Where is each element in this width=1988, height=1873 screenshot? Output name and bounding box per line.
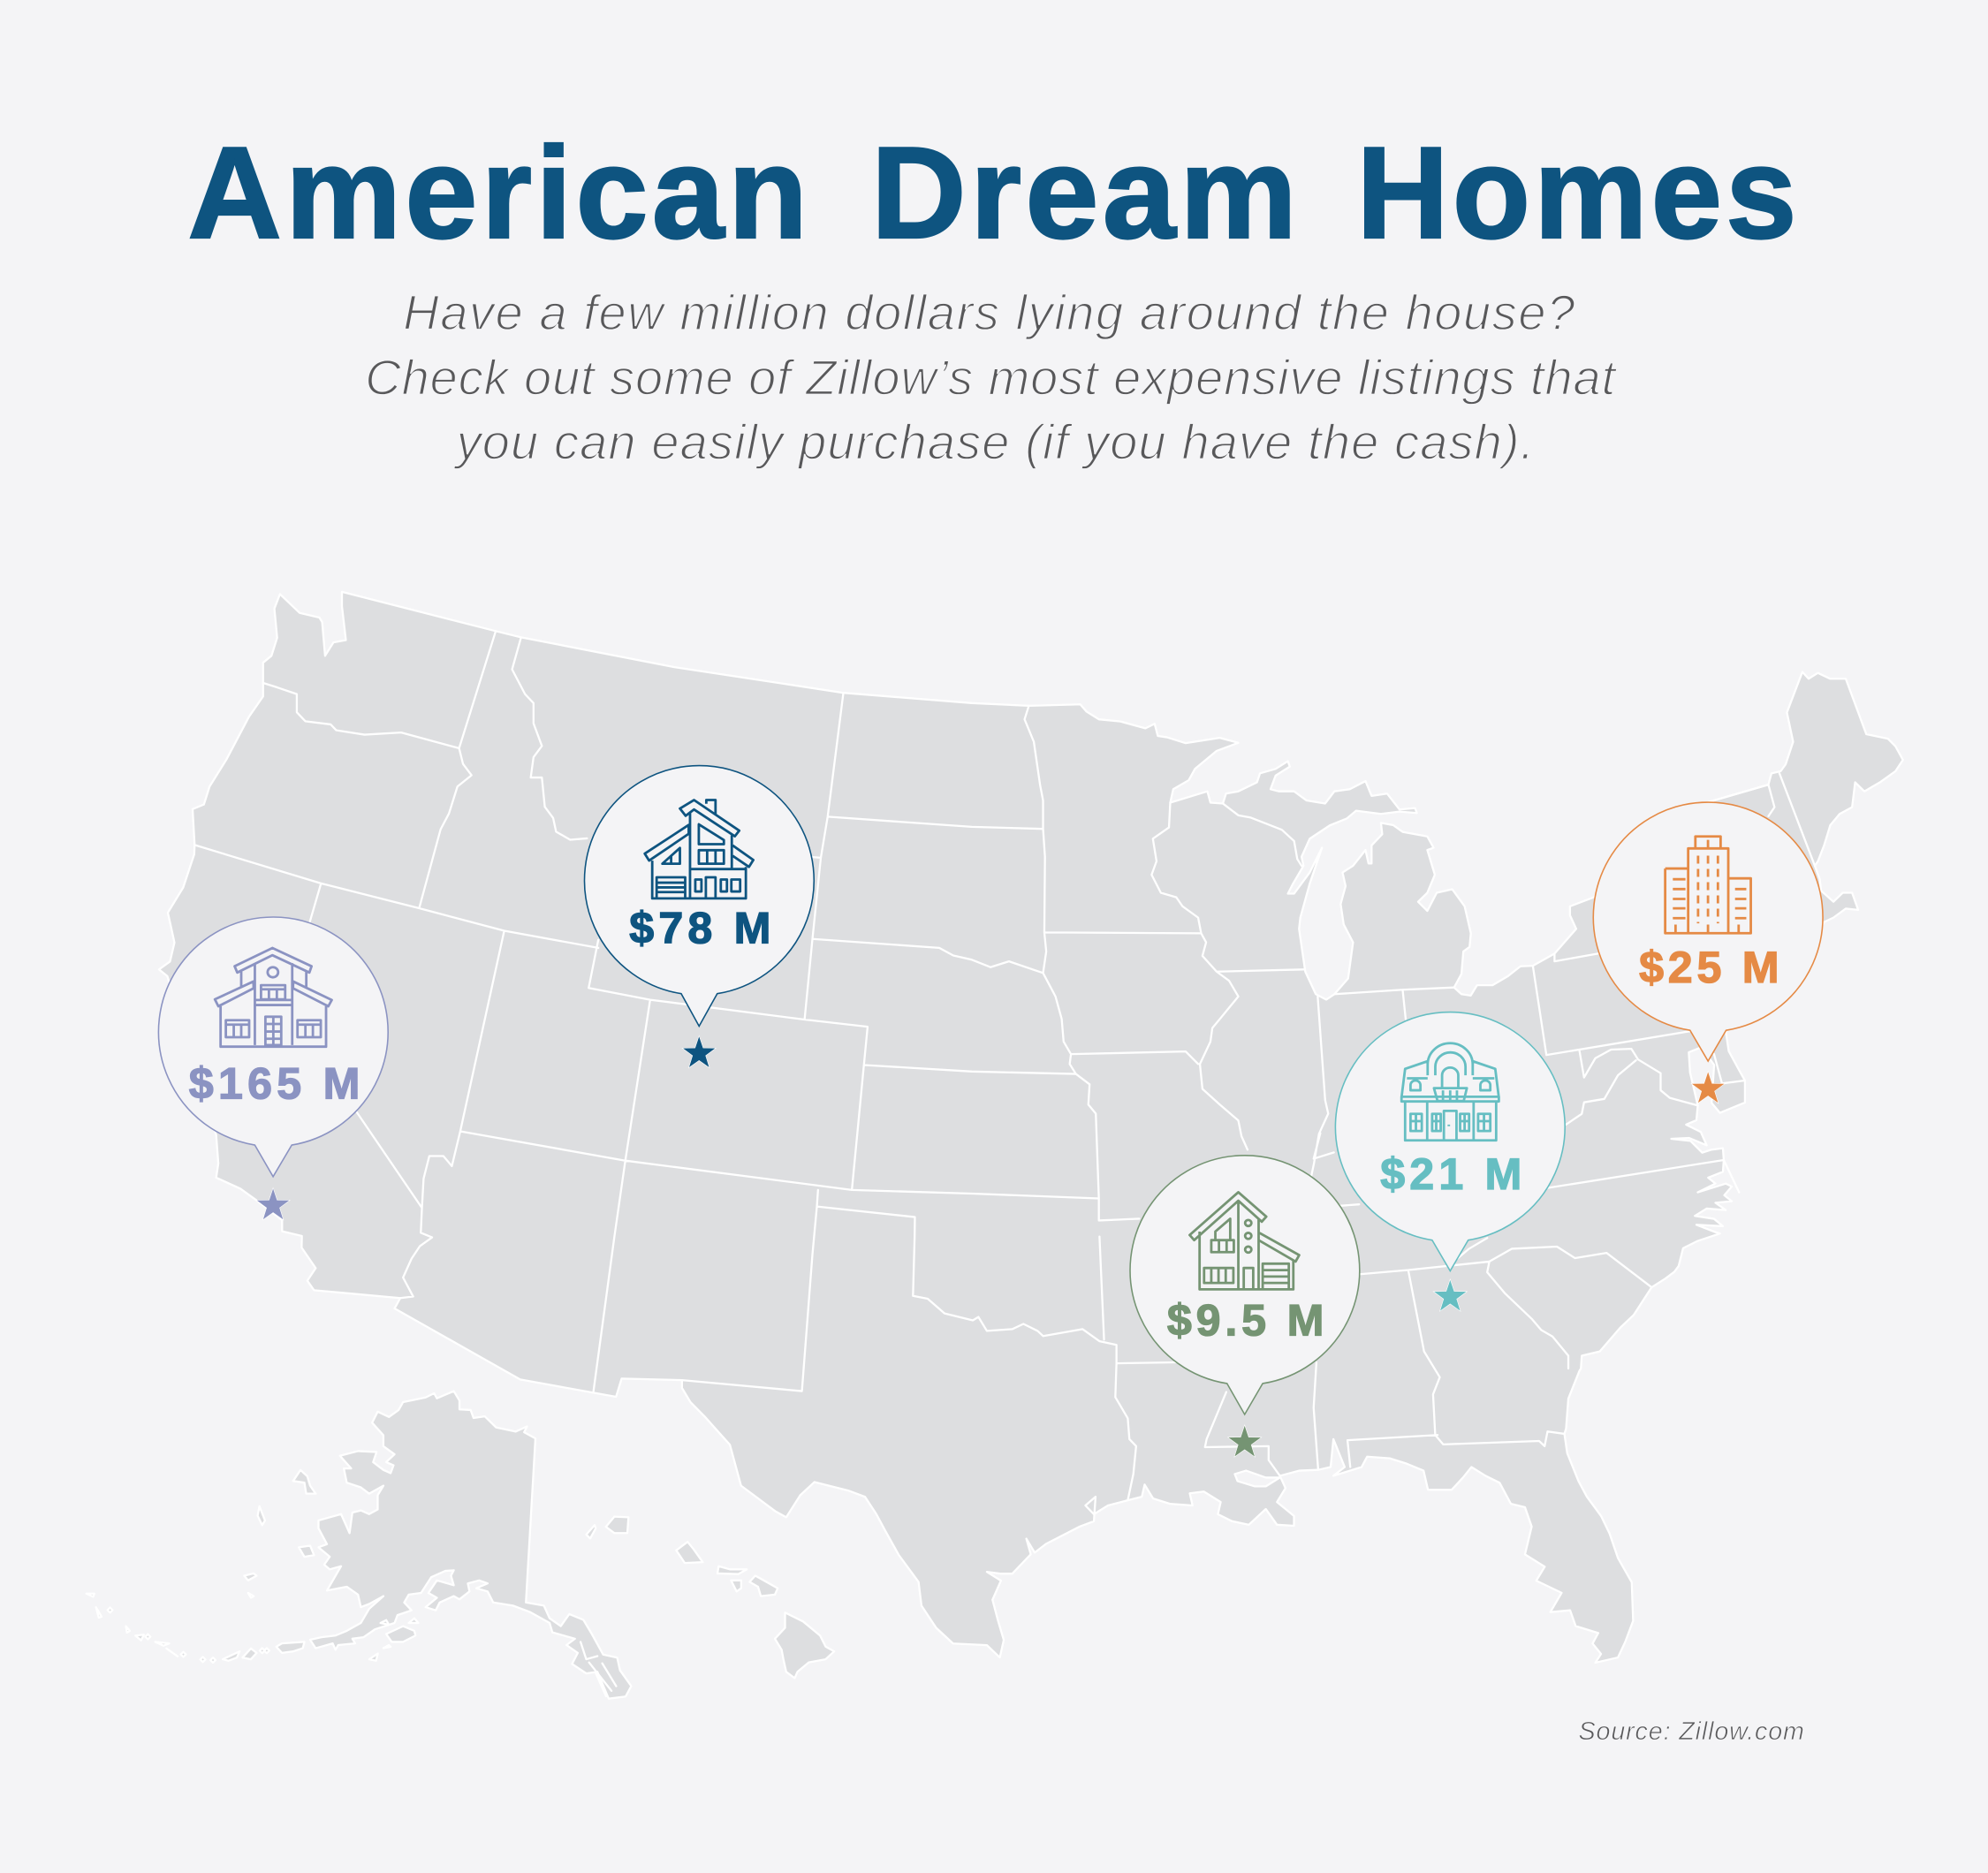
star <box>682 1035 716 1068</box>
subtitle: Check out some of Zillow’s most expensive listings that <box>365 349 1618 405</box>
marker: Washington DC area $25 M <box>1593 802 1823 1103</box>
Alaska <box>310 1391 631 1699</box>
star <box>256 1188 290 1220</box>
Hawaii <box>587 1517 834 1678</box>
title: Dream <box>871 120 1301 266</box>
icon: large farmhouse <box>215 948 332 1047</box>
price: $25 M <box>1639 943 1779 992</box>
Alaska islands <box>87 1470 418 1663</box>
bubble <box>1593 802 1823 1061</box>
marker: Georgia $21 M <box>1335 1012 1565 1311</box>
bubble <box>1130 1156 1360 1414</box>
bubble <box>158 917 388 1177</box>
icon: mansard mansion <box>1401 1043 1499 1141</box>
Lake Pontchartrain water <box>1234 1471 1280 1486</box>
star <box>1433 1279 1467 1311</box>
title: American <box>187 120 811 266</box>
map of the United States <box>87 592 1903 1699</box>
star <box>1228 1425 1262 1457</box>
title <box>187 120 1801 266</box>
price: $21 M <box>1380 1149 1521 1199</box>
title: Homes <box>1356 120 1801 266</box>
subtitle <box>365 284 1618 469</box>
marker: Wyoming / Colorado $78 M <box>585 766 814 1068</box>
bubble <box>1335 1012 1565 1271</box>
price: $9.5 M <box>1167 1295 1324 1345</box>
source note: Source: Zillow.com <box>1579 1718 1804 1746</box>
star <box>1691 1072 1725 1103</box>
subtitle: you can easily purchase (if you have the cash). <box>453 413 1534 469</box>
marker: Louisiana / Mississippi $9.5 M <box>1130 1156 1360 1457</box>
price: $78 M <box>629 904 770 953</box>
icon: modern chalet <box>645 800 754 899</box>
contiguous states landmass <box>159 592 1903 1663</box>
Alaska panhandle channels <box>580 1642 616 1696</box>
marker: Los Angeles area $165 M <box>158 917 388 1220</box>
price: $165 M <box>189 1058 360 1108</box>
bubble <box>585 766 814 1026</box>
subtitle: Have a few million dollars lying around the house? <box>403 284 1574 340</box>
state borders <box>194 631 1815 1500</box>
icon: A-frame house <box>1189 1192 1299 1289</box>
icon: tower block <box>1666 837 1751 933</box>
